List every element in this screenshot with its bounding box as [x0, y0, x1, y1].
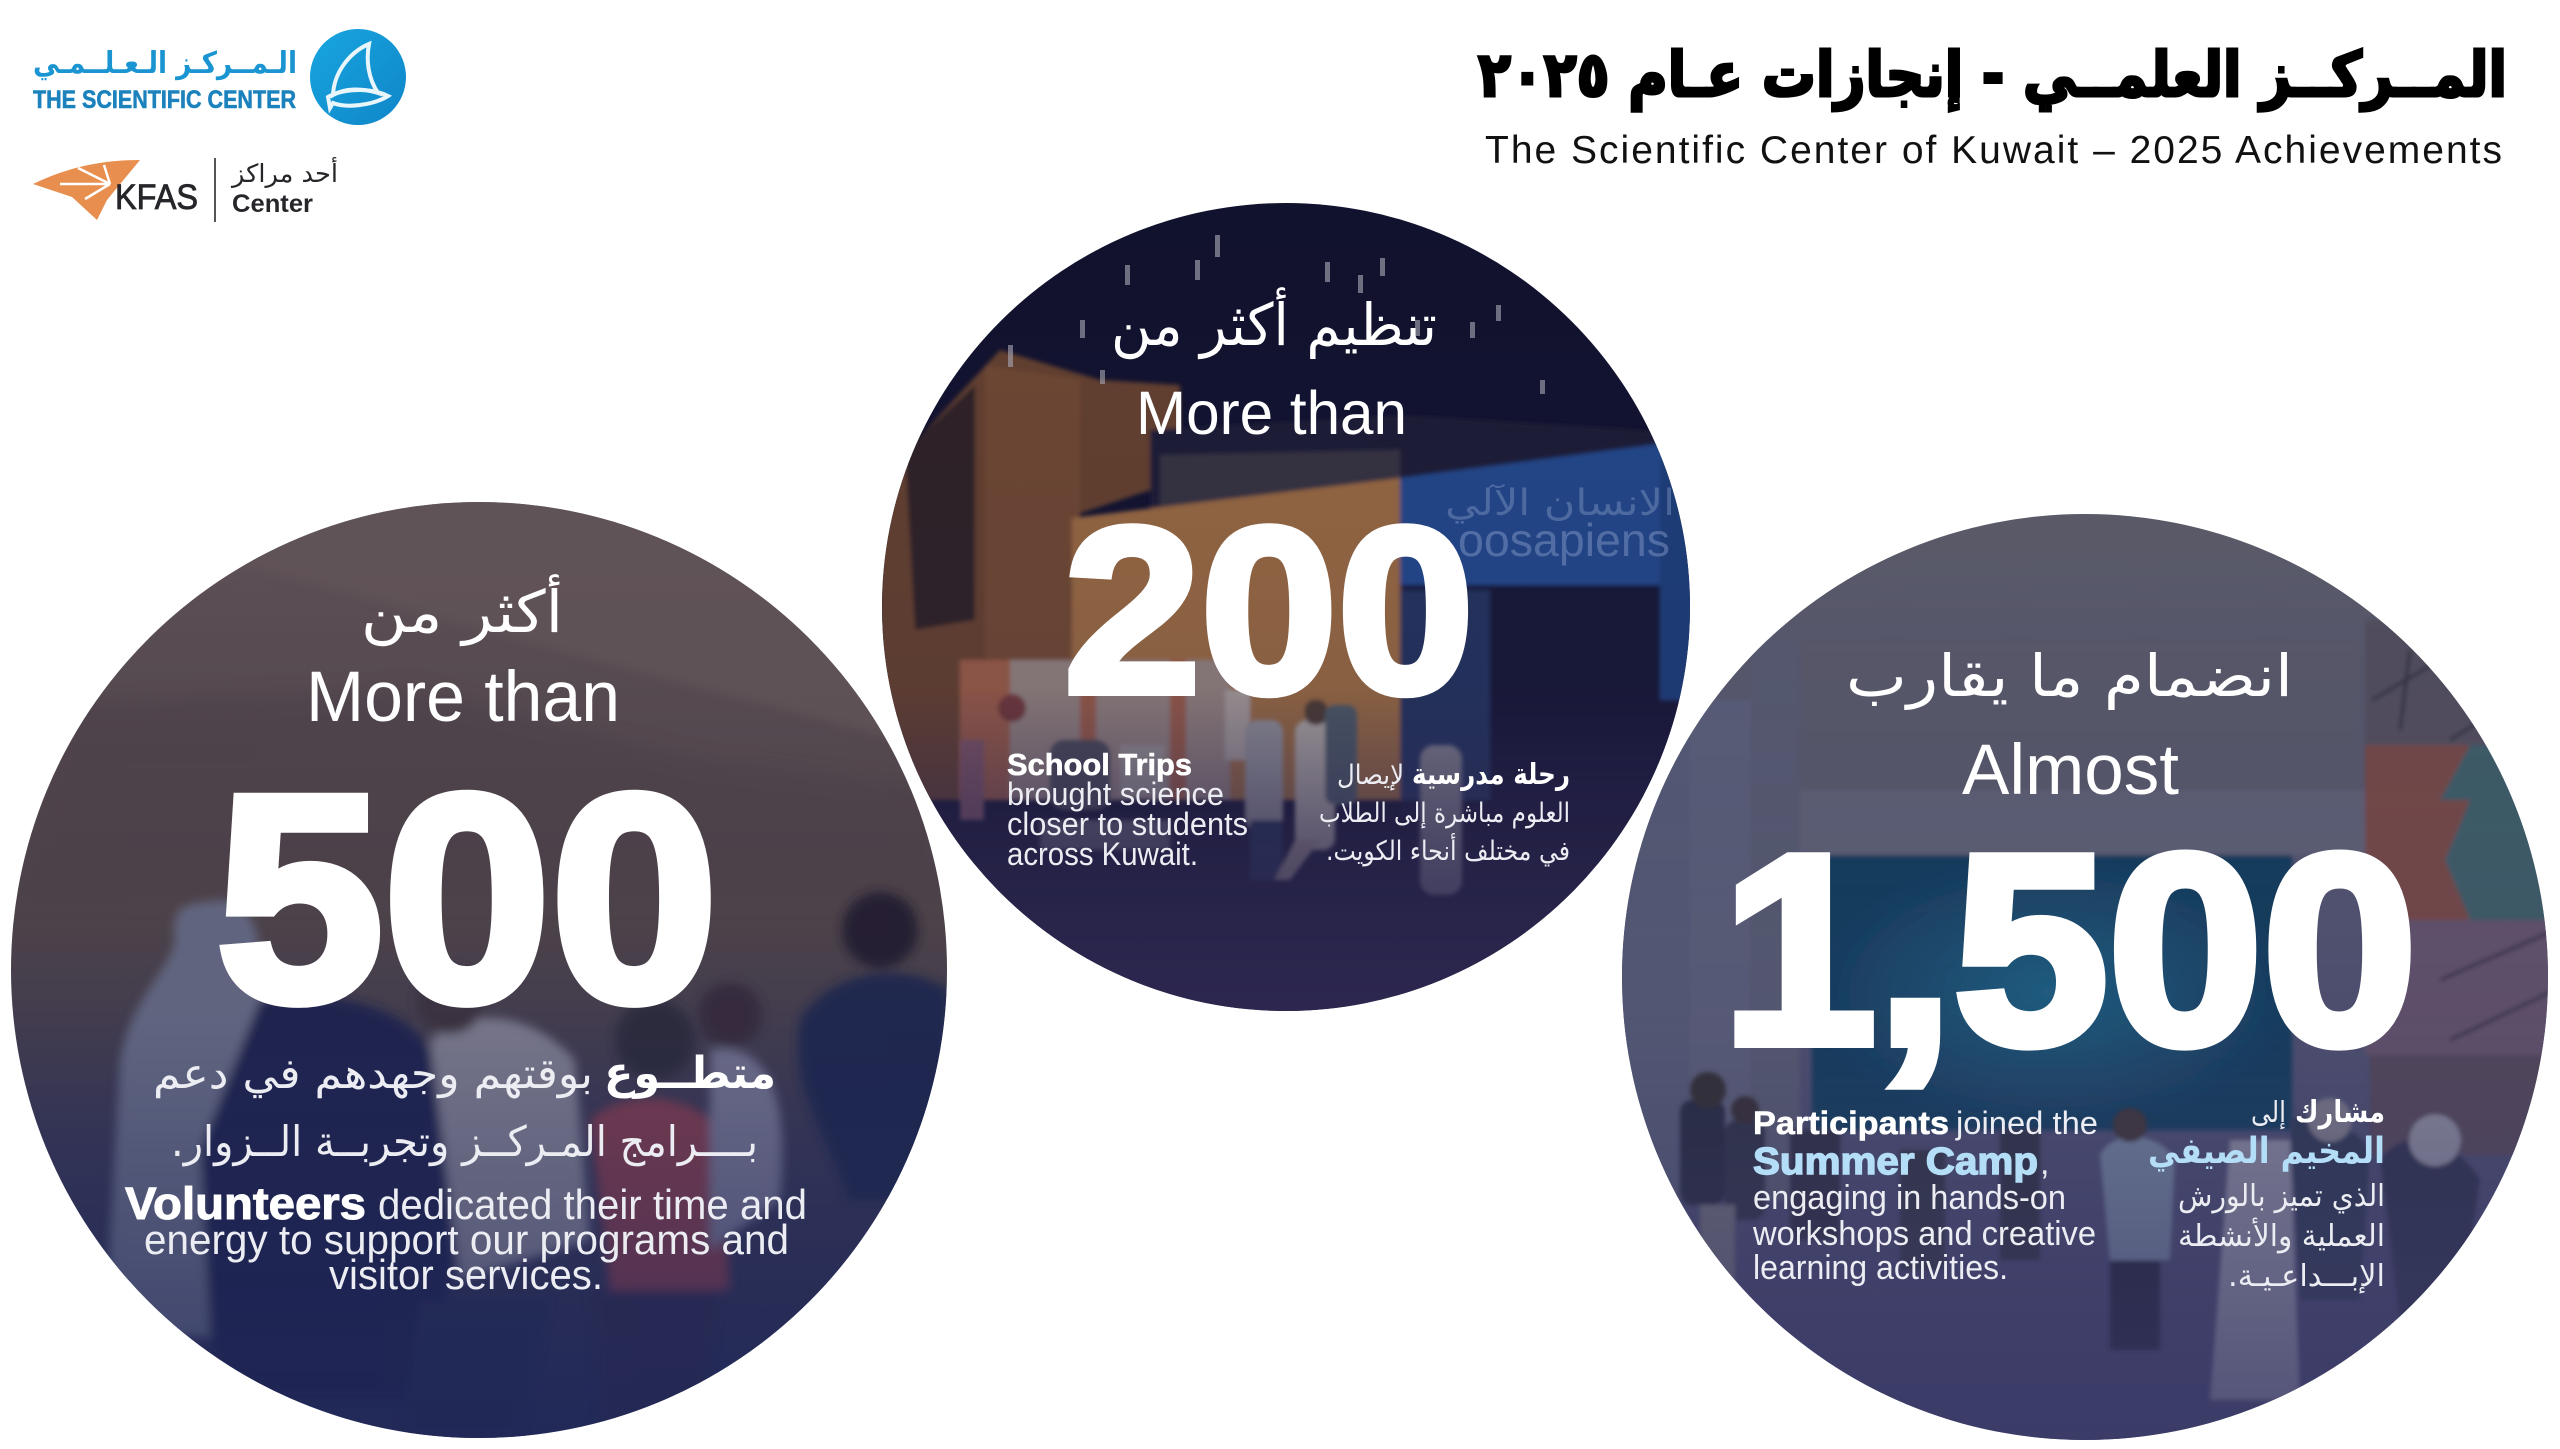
text block: Arabic description: بــــرامج المـركــز وتجربــة الــزوار.‏ [171, 1117, 758, 1167]
text block: English description [1752, 1105, 2098, 1287]
text block: English description: dedicated their time and [378, 1181, 807, 1228]
text block: English description: Summer Camp [1753, 1141, 2038, 1183]
text block: Arabic description: الذي تميز بالورش [2178, 1179, 2385, 1214]
label: more than english: More than [1136, 379, 1407, 447]
label: almost arabic: انضمام ما يقارب [1846, 642, 2293, 710]
text block: Arabic description: لإيصال [1337, 760, 1404, 791]
text block: English description: , [2040, 1144, 2049, 1182]
photo: exhibition hall: الانسان الآلي [1445, 483, 1675, 524]
logo: KFAS Center: أحد مراكز [230, 156, 338, 188]
text block: English description: Volunteers [125, 1178, 366, 1229]
text block: Arabic description: المخيم الصيفي [2148, 1131, 2385, 1172]
label: more than arabic: تنظيم أكثر من [1111, 287, 1437, 360]
text block: Arabic description: العلوم مباشرة إلى الطلاب [1319, 798, 1570, 829]
label: almost english: Almost [1962, 731, 2179, 810]
text block: Arabic description: الإبـــداعـيـة.‏ [2228, 1259, 2385, 1294]
panel: school trips circle [880, 200, 1700, 1012]
photo: exhibition hall: oosapiens [1458, 514, 1670, 566]
text block: English description: Participants [1753, 1105, 1949, 1141]
panel: volunteers circle [0, 490, 960, 1449]
logo: KFAS Center: Center [232, 190, 313, 218]
text block: English description: engaging in hands-on [1753, 1179, 2066, 1217]
label: more than arabic: أكثر من [361, 574, 563, 647]
text block: Arabic description [2148, 1095, 2385, 1294]
logo: The Scientific Center: THE SCIENTIFIC CENTER [33, 86, 296, 114]
text block: Arabic description [1319, 757, 1570, 867]
logo: The Scientific Center [33, 29, 406, 125]
number: 200: 200 [1064, 479, 1474, 743]
photo: exhibition hall [880, 200, 1700, 1012]
text block: English description: closer to students [1007, 806, 1248, 842]
text block: Arabic description: مشارك [2295, 1095, 2385, 1130]
text block: English description: visitor services. [329, 1251, 603, 1298]
text block: Arabic description: في مختلف أنحاء الكويت.‏ [1326, 832, 1570, 867]
text block: English description: learning activities. [1753, 1249, 2008, 1287]
text block: Arabic description: إلى [2251, 1095, 2286, 1130]
logo: KFAS Center [33, 156, 338, 222]
text block: English description [125, 1178, 807, 1298]
text block: Arabic description: رحلة مدرسية [1412, 757, 1570, 791]
number: 500: 500 [216, 735, 718, 1063]
text block: Arabic description: متطــوع [604, 1048, 776, 1099]
text block: Arabic description: العملية والأنشطة [2178, 1216, 2385, 1254]
photo: atrium with screen [1610, 500, 2560, 1449]
text block: Arabic description [153, 1048, 776, 1167]
panel: summer camp circle [1610, 500, 2560, 1449]
text block: English description: brought science [1007, 776, 1224, 812]
text block: English description: across Kuwait. [1007, 836, 1198, 872]
text block: English description: School Trips [1007, 747, 1192, 782]
subtitle: English heading: The Scientific Center of Kuwait – 2025 Achievements [1485, 129, 2502, 172]
logo: The Scientific Center: الـمــركـز الـعـلــمـي [33, 46, 297, 81]
photo: volunteers walking [0, 490, 960, 1449]
logo: KFAS Center: KFAS [115, 178, 198, 217]
text block: English description: workshops and creative [1752, 1215, 2096, 1253]
text block: English description [1007, 747, 1248, 872]
text block: Arabic description: بوقتهم وجهدهم في دعم [153, 1049, 593, 1099]
number: 1,500: 1,500 [1722, 800, 2417, 1101]
text block: English description: joined the [1955, 1105, 2098, 1141]
text block: English description: energy to support our programs and [144, 1216, 789, 1263]
label: more than english: More than [306, 658, 620, 737]
